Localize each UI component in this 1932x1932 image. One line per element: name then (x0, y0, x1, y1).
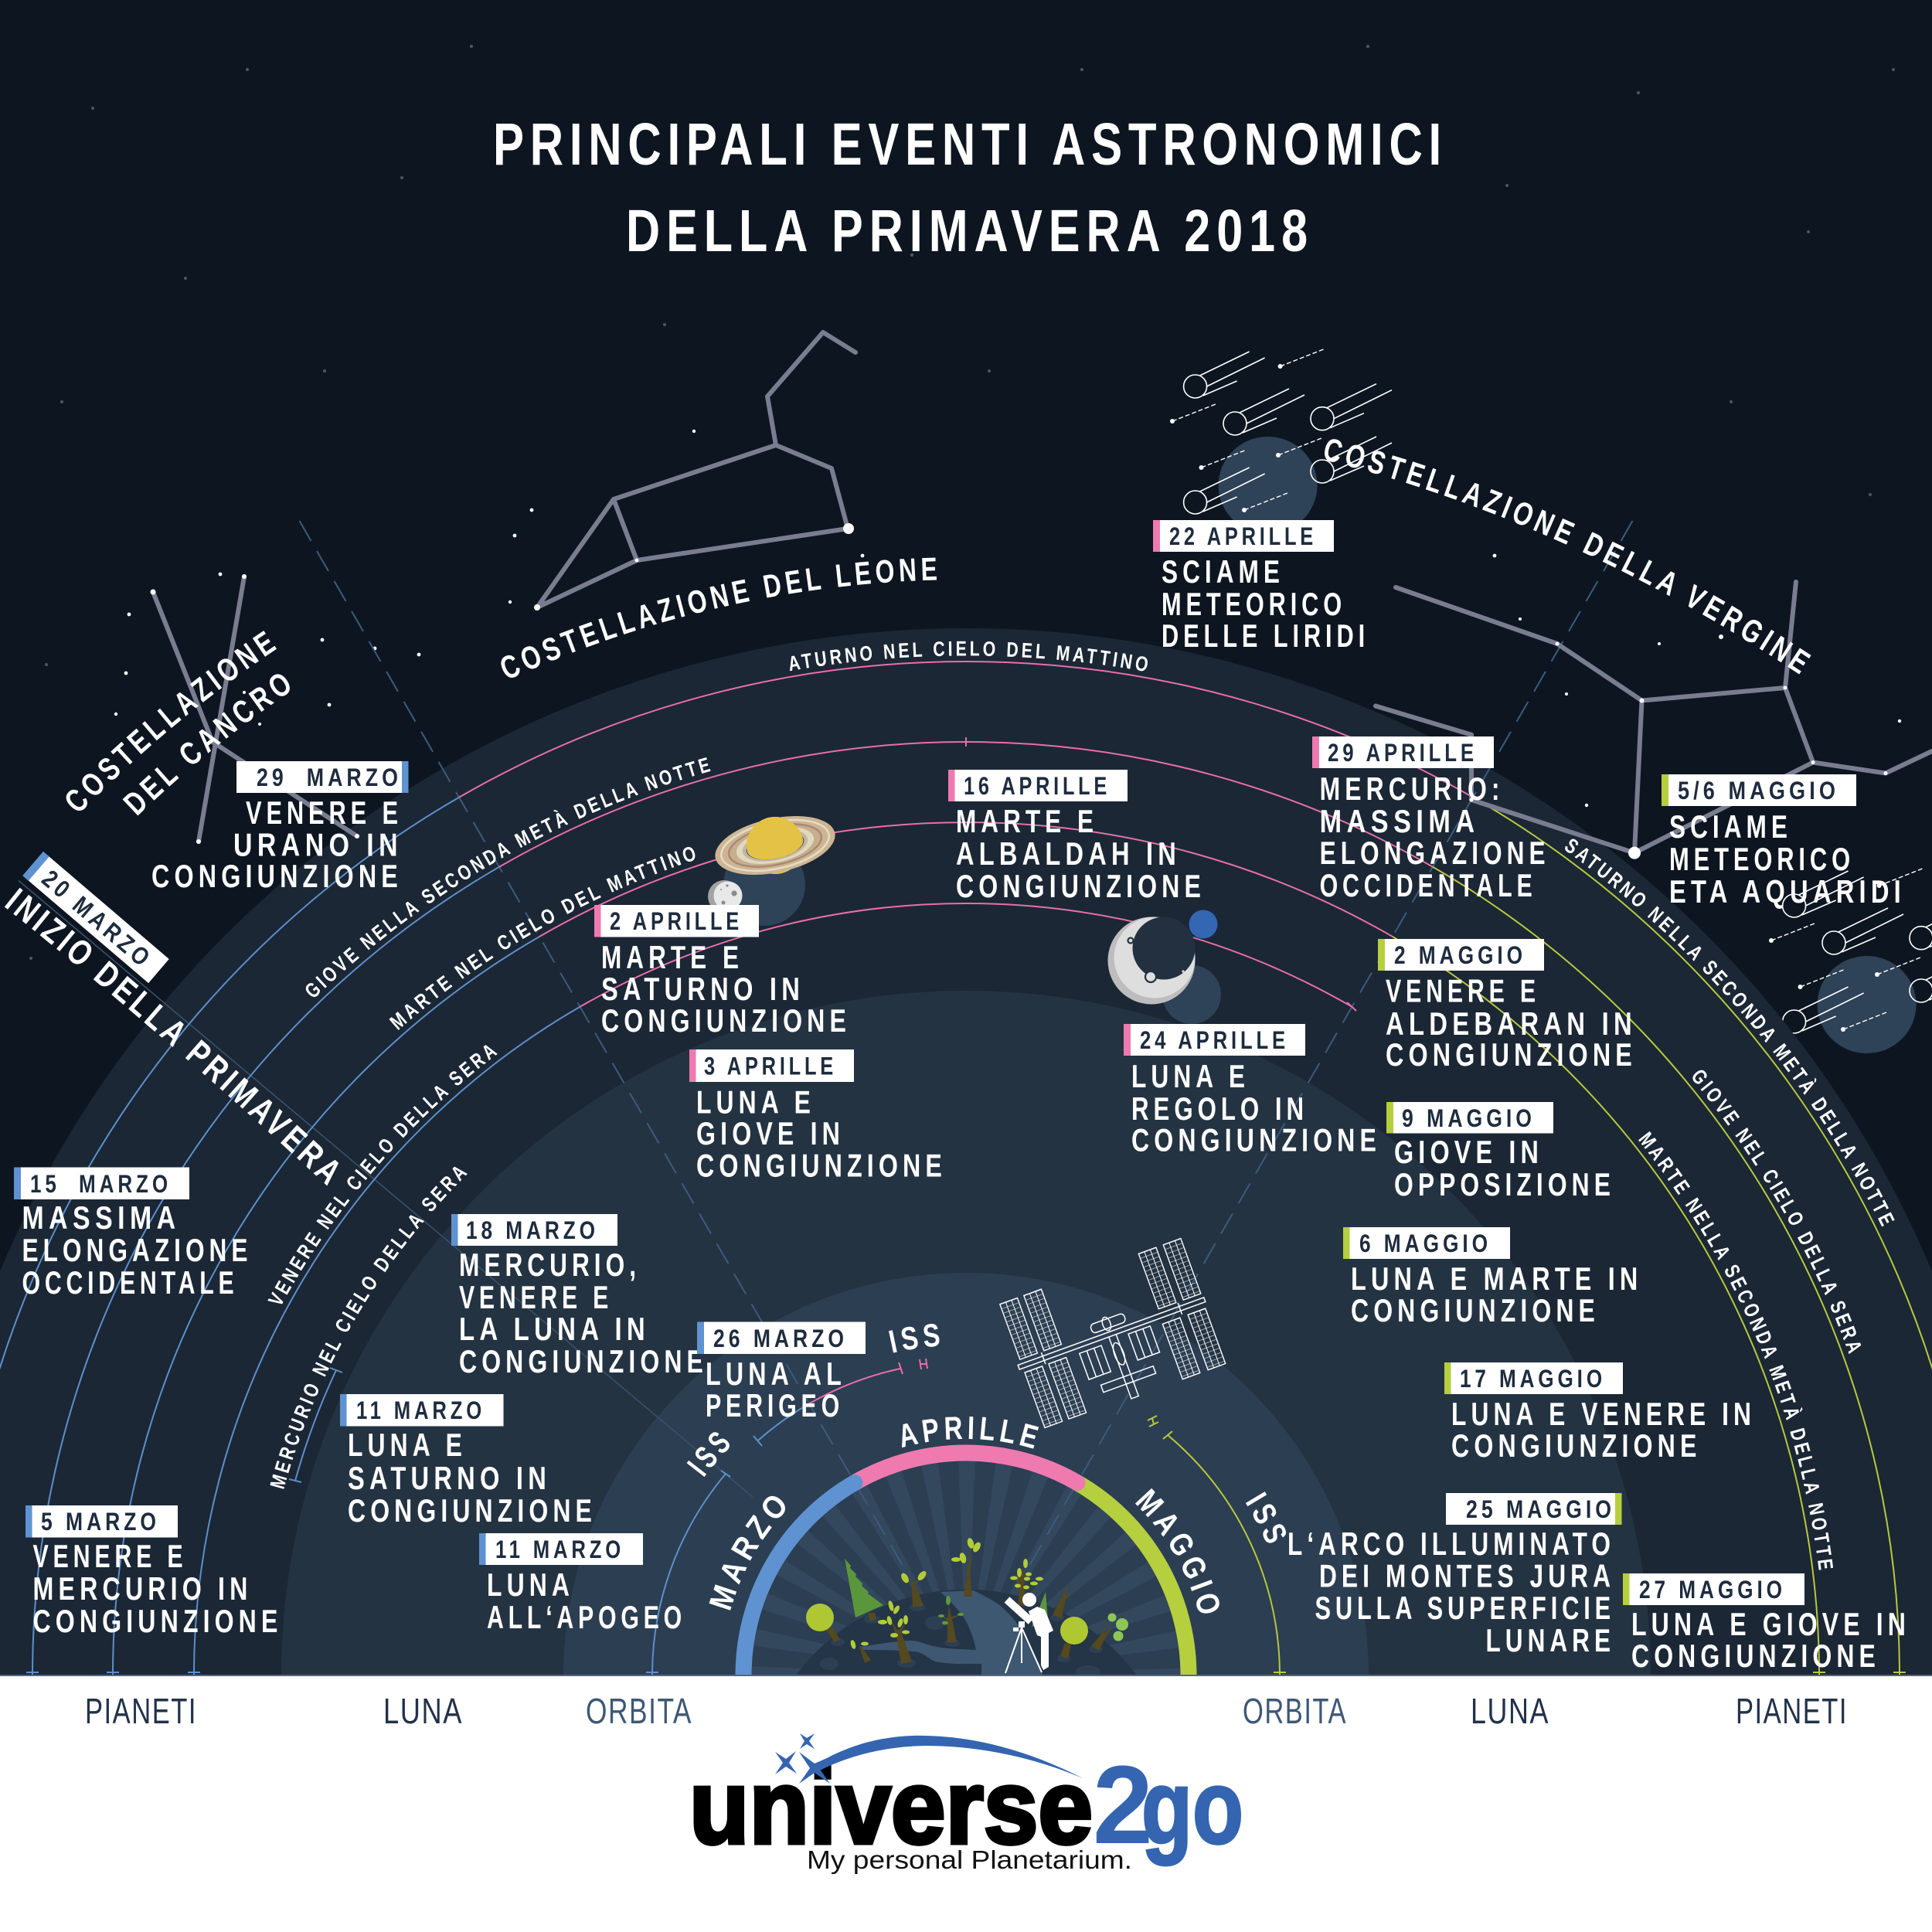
description (1451, 1396, 1756, 1464)
description (348, 1427, 597, 1529)
description (601, 939, 851, 1039)
event: 5/6 maggio (1662, 774, 1906, 910)
star field (29, 45, 1901, 1547)
band: planets (0, 628, 1932, 1675)
description: MERCURIO, (459, 1247, 641, 1283)
date tag: 18 MARZO (466, 1216, 599, 1244)
date tag: 29 MARZO (257, 764, 402, 791)
description: CONGIUNZIONE (32, 1603, 283, 1639)
description: LA LUNA IN (459, 1311, 650, 1347)
month label: maggio: MAGGIO (1135, 1488, 1219, 1614)
description: VENERE E (1386, 972, 1540, 1009)
description: METEORICO (1669, 841, 1855, 877)
description: DEI MONTES JURA (1319, 1558, 1615, 1594)
description: CONGIUNZIONE (1131, 1122, 1381, 1158)
description: LUNA E (348, 1427, 467, 1463)
band: moon (281, 991, 1651, 1675)
date tag: 26 MARZO (713, 1325, 848, 1352)
planet arc labels: SATURNO NELLA SECONDA METÀ DELLA NOTTE (1565, 839, 1895, 1227)
ray wedges (858, 1567, 1074, 1784)
date tag: 25 MAGGIO (1466, 1495, 1615, 1523)
date tag: 20 marzo: 20 MARZO (36, 865, 158, 974)
description: MASSIMA (1320, 803, 1480, 839)
date tag: 5/6 MAGGIO (1678, 777, 1839, 804)
date tag (236, 761, 408, 793)
icon: International Space Station (996, 1238, 1228, 1431)
backing planet (723, 844, 805, 926)
callout: 20 marzo inizio della primavera (5, 852, 338, 1185)
event: 3 aprille (689, 1049, 947, 1184)
description: CONGIUNZIONE (956, 868, 1206, 904)
description (459, 1247, 708, 1379)
description: CONGIUNZIONE (459, 1343, 708, 1379)
round tree left (806, 1604, 840, 1642)
event: 15 marzo (14, 1167, 252, 1301)
inizio della primavera: INIZIO DELLA PRIMAVERA (5, 887, 338, 1185)
month ring (743, 1453, 1189, 1675)
date tag: 2 MAGGIO (1394, 941, 1526, 969)
description: CONGIUNZIONE (151, 858, 403, 894)
date tag: 15 MARZO (30, 1170, 172, 1198)
footer labels (85, 1691, 1848, 1731)
river (860, 1590, 1043, 1675)
earth scene (796, 1537, 1137, 1678)
description: REGOLO IN (1131, 1090, 1308, 1127)
planet orbits: may (1393, 798, 1932, 1675)
icon: Saturn and moon (708, 804, 841, 926)
description: ALBALDAH IN (956, 835, 1181, 872)
description: OCCIDENTALE (1320, 867, 1537, 903)
ISS orbit segments (646, 1359, 1286, 1675)
planet arc labels: GIOVE NEL CIELO DELLA SERA (1692, 1070, 1861, 1354)
small moon (708, 880, 742, 913)
description: SATURNO IN (348, 1460, 551, 1496)
month dividers (300, 521, 1632, 1575)
logo: universe2go (689, 1733, 1243, 1874)
event: 17 maggio (1444, 1362, 1756, 1464)
description (1131, 1058, 1381, 1158)
planet orbits: april (459, 662, 1473, 1011)
event: 5 marzo (26, 1505, 283, 1639)
date tag (1446, 1493, 1621, 1525)
description (696, 1083, 947, 1184)
description: GIOVE IN (1394, 1134, 1543, 1170)
footer labels: ORBITA (586, 1691, 692, 1731)
description: CONGIUNZIONE (348, 1492, 597, 1529)
band: orbit (563, 1273, 1369, 1675)
description: ALL‘APOGEO (487, 1599, 686, 1635)
event: 16 aprille (948, 770, 1206, 904)
label: Costellazione del Leone: COSTELLAZIONE DEL LEONE (501, 558, 937, 678)
footer labels: PIANETI (1736, 1691, 1848, 1731)
description: PERIGEO (706, 1387, 844, 1423)
planet arc labels: ATURNO NEL CIELO DEL MATTINO (790, 641, 1148, 671)
date tag: 24 APRILLE (1140, 1026, 1289, 1054)
description (706, 1355, 846, 1423)
description: LUNA (487, 1566, 574, 1603)
label: Costellazione del Cancro: COSTELLAZIONE (66, 631, 277, 811)
planet orbits: march (0, 798, 580, 1675)
event: 25 maggio (1287, 1493, 1621, 1658)
description: DELLE LIRIDI (1162, 617, 1369, 654)
description: CONGIUNZIONE (1451, 1427, 1702, 1464)
description: L‘ARCO ILLUMINATO (1287, 1526, 1615, 1562)
description: CONGIUNZIONE (1351, 1292, 1600, 1328)
description (32, 1538, 283, 1639)
event: 24 aprille (1124, 1024, 1381, 1158)
footer divider (0, 1675, 1932, 1676)
planet arc labels: MARTE NEL CIELO DEL MATTINO (389, 847, 696, 1030)
description: LUNA E (1131, 1058, 1250, 1094)
description: ELONGAZIONE (1320, 835, 1550, 871)
event: 11 marzo, Saturno (340, 1394, 597, 1529)
title: PRINCIPALI EVENTI ASTRONOMICI (493, 111, 1447, 178)
description: ALDEBARAN IN (1386, 1005, 1637, 1042)
month label: marzo: MARZO (709, 1496, 785, 1611)
date tag: 3 APRILLE (704, 1053, 837, 1080)
ground blobs (820, 1604, 1103, 1678)
description: OPPOSIZIONE (1394, 1166, 1615, 1202)
date tag: 22 APRILLE (1169, 522, 1317, 550)
swoosh and stars (775, 1733, 1083, 1784)
description (487, 1566, 686, 1635)
description: MERCURIO IN (32, 1570, 252, 1607)
description: LUNA E (696, 1083, 815, 1121)
description: CONGIUNZIONE (601, 1002, 851, 1039)
description: LUNA AL (706, 1355, 846, 1392)
description: VENERE E (459, 1279, 613, 1315)
description: GIOVE IN (696, 1115, 845, 1151)
description (1631, 1606, 1910, 1674)
description: METEORICO (1162, 586, 1346, 622)
date tag: 11 MARZO (356, 1396, 485, 1424)
label: Costellazione del Cancro: DEL CANCRO (122, 674, 290, 816)
footer labels: LUNA (1471, 1691, 1549, 1731)
meteor shower: Eta Aquaridi (1769, 869, 1932, 1053)
description: LUNA E VENERE IN (1451, 1396, 1756, 1432)
title (493, 111, 1447, 264)
constellation: Cancro (150, 574, 359, 844)
planet arc labels: MARTE NELLA SECONDA METÀ DELLA NOTTE (1638, 1131, 1833, 1570)
small pine behind observer (1032, 1592, 1048, 1627)
ISS label top: ISS (889, 1324, 940, 1352)
description (1320, 770, 1550, 903)
round tree right (1060, 1617, 1088, 1658)
icon: crescent moon and planets (1108, 910, 1221, 1024)
description (1669, 808, 1906, 910)
description: CONGIUNZIONE (696, 1148, 947, 1184)
description: MARTE E (601, 939, 743, 975)
footer labels: ORBITA (1243, 1691, 1347, 1731)
description (1351, 1260, 1643, 1328)
ground (796, 1590, 1137, 1675)
wordmark: universe (689, 1748, 1093, 1866)
date tag: 17 MAGGIO (1460, 1365, 1606, 1393)
footer labels: PIANETI (85, 1691, 197, 1731)
event: 6 maggio (1343, 1227, 1643, 1328)
description (22, 1199, 252, 1301)
start of spring line (19, 881, 753, 1497)
date tag: 29 APRILLE (1328, 739, 1478, 767)
logo: universe2go: 2 (1093, 1743, 1153, 1867)
ISS label right: ISS (1246, 1492, 1286, 1543)
ISS label left: ISS (686, 1432, 730, 1477)
description: SCIAME (1669, 808, 1792, 845)
description: SATURNO IN (601, 971, 804, 1007)
description: VENERE E (32, 1538, 187, 1574)
logo: universe2go: go (1141, 1748, 1243, 1866)
constellation: Vergine (1376, 582, 1932, 859)
event: 2 aprille (594, 905, 851, 1039)
description (1162, 553, 1369, 654)
date tag: 11 MARZO (495, 1536, 624, 1563)
event: 26 marzo (697, 1321, 866, 1423)
description: SULLA SUPERFICIE (1315, 1590, 1615, 1626)
description: CONGIUNZIONE (1386, 1036, 1637, 1073)
saplings: trunks (859, 1551, 1113, 1664)
tagline: My personal Planetarium. (807, 1845, 1132, 1874)
description (1394, 1134, 1615, 1202)
event: 18 marzo (451, 1214, 708, 1379)
date tag: 9 MAGGIO (1402, 1104, 1536, 1132)
planet arc labels (267, 641, 1895, 1570)
planet arc labels: MERCURIO NEL CIELO DELLA SERA (270, 1167, 468, 1489)
footer labels: LUNA (383, 1691, 463, 1731)
description: MASSIMA (22, 1199, 181, 1236)
meteor shower: Liridi (1170, 349, 1392, 534)
planet arc labels: VENERE NEL CIELO DELLA SERA (267, 1045, 498, 1304)
description (151, 794, 403, 894)
description: MARTE E (956, 803, 1098, 839)
event: 9 maggio (1386, 1102, 1615, 1202)
event: 11 marzo, apogeo (479, 1533, 686, 1635)
description: URANO IN (233, 827, 403, 862)
description: ELONGAZIONE (22, 1232, 252, 1268)
event: 29 marzo (151, 761, 408, 894)
description: LUNARE (1485, 1622, 1615, 1658)
three-berry tree (1108, 1614, 1128, 1641)
white footer panel (0, 1675, 1932, 1932)
description: SCIAME (1162, 553, 1284, 590)
date tag: 16 APRILLE (964, 772, 1111, 800)
event: 29 aprille (1312, 736, 1550, 903)
label: Costellazione della Vergine: COSTELLAZIONE DELLA VERGINE (1325, 439, 1811, 674)
event: 27 maggio (1623, 1573, 1910, 1674)
constellation: Leone (534, 332, 855, 611)
description: MERCURIO: (1320, 770, 1505, 807)
pine tree (845, 1559, 883, 1621)
planet arc labels: GIOVE NELLA SECONDA METÀ DELLA NOTTE (306, 757, 711, 997)
date tag: 2 APRILLE (610, 907, 743, 935)
observer with telescope (1005, 1593, 1053, 1673)
description (1386, 972, 1637, 1073)
date tag: 5 MARZO (41, 1508, 160, 1536)
description (1287, 1526, 1615, 1658)
event: 2 maggio (1378, 939, 1637, 1073)
month label: aprille: APRILLE (902, 1417, 1039, 1449)
date tag: 6 MAGGIO (1359, 1230, 1492, 1257)
ringed planet (709, 804, 841, 886)
description (956, 803, 1206, 904)
description: VENERE E (246, 794, 403, 831)
saplings: leaves (850, 1537, 1043, 1650)
event: 22 aprille (1153, 520, 1369, 654)
description: LUNA E MARTE IN (1351, 1260, 1643, 1297)
date tag: 27 MAGGIO (1639, 1576, 1786, 1604)
description: OCCIDENTALE (22, 1264, 238, 1301)
title: DELLA PRIMAVERA 2018 (626, 198, 1314, 264)
